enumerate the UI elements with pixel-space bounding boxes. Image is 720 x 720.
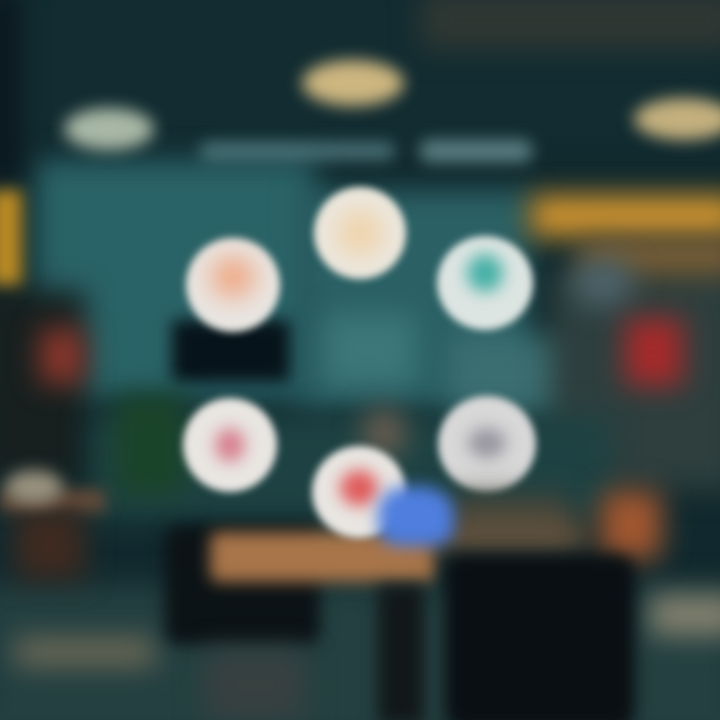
background: right back room bbox=[550, 270, 720, 490]
floor bbox=[0, 585, 720, 720]
table right bbox=[435, 522, 585, 550]
red box left bbox=[40, 328, 84, 384]
glyph bbox=[215, 428, 245, 462]
yellow light left bbox=[0, 190, 22, 285]
centre text block bbox=[325, 315, 415, 385]
table lamp left bbox=[5, 470, 63, 504]
person silhouette bbox=[362, 408, 406, 458]
pendant lamp left bbox=[64, 108, 154, 150]
table pedestal bbox=[378, 585, 424, 720]
wall poster right bbox=[572, 258, 634, 308]
background: teal wall centre bbox=[300, 190, 530, 410]
glyph bbox=[340, 470, 378, 506]
glyph bbox=[212, 258, 254, 296]
floor: warm left patch bbox=[15, 638, 155, 666]
ring bbox=[186, 238, 280, 332]
background: person torso bbox=[450, 495, 570, 535]
glyph bbox=[467, 254, 503, 292]
background: wall diagonal light bbox=[450, 335, 590, 420]
circle icon: upper left bbox=[180, 232, 286, 338]
background: ceiling beams bbox=[420, 0, 720, 50]
background: ceiling bbox=[0, 0, 720, 150]
glyph bbox=[338, 211, 382, 255]
circle icon: lower left bbox=[177, 392, 283, 498]
title: blurred heading right bbox=[420, 140, 532, 162]
background: left dark column bbox=[0, 0, 20, 180]
floor: warm right patch bbox=[650, 595, 720, 635]
ring bbox=[437, 236, 533, 330]
ring bbox=[312, 446, 406, 538]
ring bbox=[183, 398, 277, 492]
circle icon: lower right bbox=[432, 390, 542, 496]
orange wall right bbox=[530, 195, 720, 237]
title: blurred heading left bbox=[200, 142, 395, 160]
blue laptop blob bbox=[378, 486, 454, 546]
pendant lamp right bbox=[634, 98, 720, 140]
left chair legs bbox=[205, 650, 305, 720]
orange wall right lower bbox=[580, 240, 720, 275]
plant bbox=[115, 395, 185, 495]
ring bbox=[314, 187, 406, 279]
background: left shelf bbox=[0, 290, 85, 480]
orange chair right bbox=[600, 490, 662, 560]
dark panel bbox=[172, 320, 290, 382]
table top bbox=[210, 532, 435, 582]
left side table bbox=[0, 490, 105, 512]
dark chair right bbox=[445, 555, 635, 720]
circle icon: upper right bbox=[431, 230, 539, 336]
pendant lamp centre bbox=[302, 60, 404, 106]
glyph bbox=[468, 428, 506, 458]
circle icon: bottom centre bbox=[306, 440, 411, 544]
dark chair left bbox=[165, 525, 320, 645]
circle icon: top centre bbox=[308, 180, 412, 285]
background: teal wall left bbox=[35, 160, 315, 400]
background: lower wall bbox=[90, 415, 610, 520]
red box right bbox=[625, 318, 683, 386]
left side table base bbox=[15, 510, 85, 580]
ring bbox=[438, 396, 536, 492]
